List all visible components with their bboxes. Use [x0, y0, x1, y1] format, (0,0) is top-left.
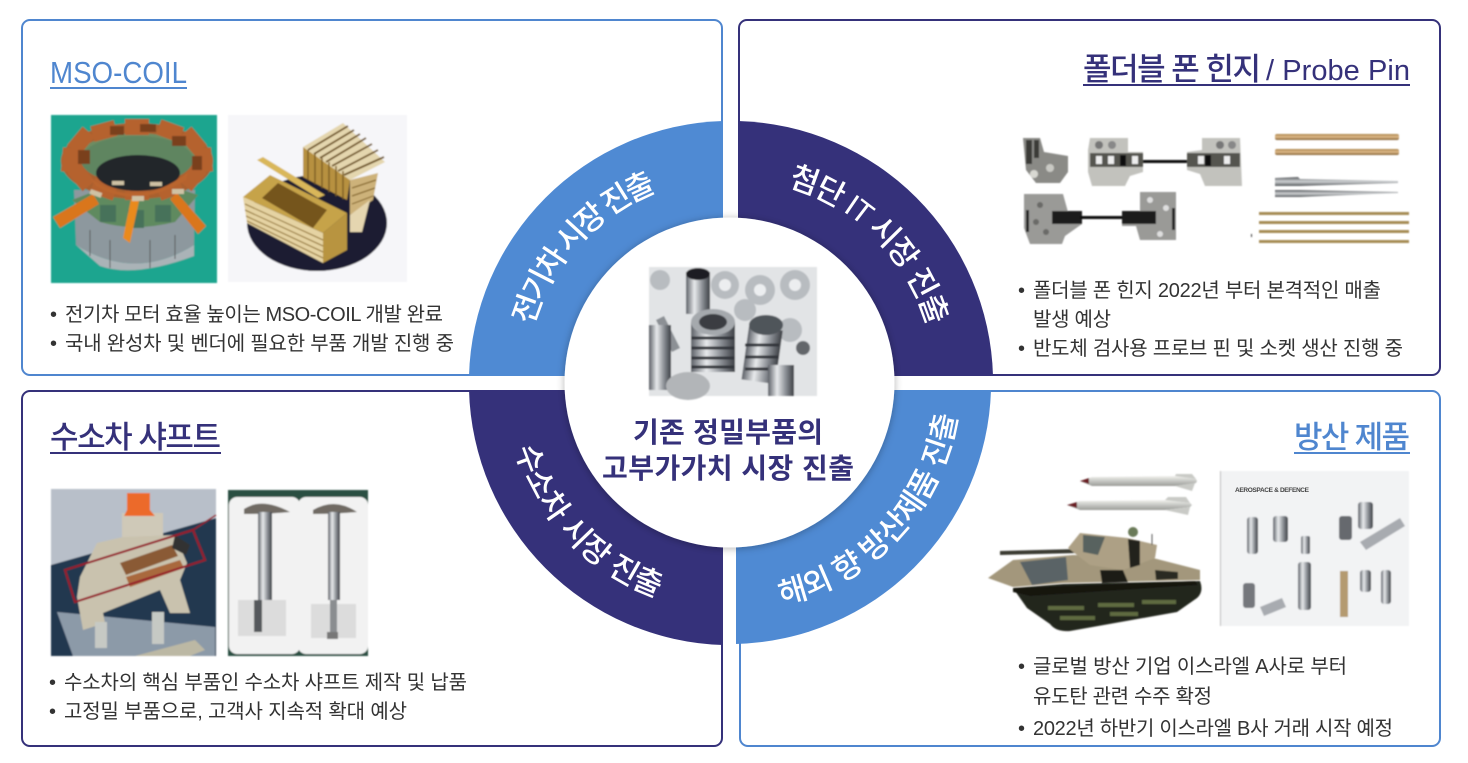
text: defense bullets: 유도탄 관련 수주 확정	[1033, 685, 1212, 708]
photo: aerospace and defence parts: AEROSPACE & DEFENCE	[1235, 487, 1310, 494]
photo: missiles and tank	[988, 474, 1201, 631]
photo: hinge parts	[1023, 138, 1242, 244]
text: hinge bullets: •	[1018, 338, 1025, 360]
heading: foldable phone hinge / Probe Pin	[1083, 52, 1410, 87]
text: MSO-COIL bullets: •	[50, 333, 57, 355]
text: MSO-COIL bullets: 전기차 모터 효율 높이는 MSO-COIL 개발 완료	[65, 303, 443, 326]
ring: quadrant electric vehicle market	[469, 121, 721, 374]
ring: quadrant hydrogen vehicle market	[469, 392, 721, 645]
photo: motor stator coil	[51, 115, 217, 283]
photo: fuel cell motor	[51, 489, 216, 656]
text: hinge bullets: •	[1018, 280, 1025, 302]
center title: 기존 정밀부품의	[633, 417, 823, 448]
photo: aerospace and defence parts	[1220, 471, 1409, 626]
center title: 고부가가치 시장 진출	[602, 453, 854, 484]
text: shaft bullets	[49, 671, 467, 723]
text: hinge bullets	[1018, 279, 1403, 360]
text: shaft bullets: 수소차의 핵심 부품인 수소차 샤프트 제작 및 납품	[64, 671, 467, 694]
ring: quadrant overseas defense market: 해외 향 방산제품 진출	[778, 414, 959, 602]
heading: MSO-COIL: MSO-COIL	[50, 55, 187, 90]
text: hinge bullets: 발생 예상	[1033, 308, 1111, 331]
heading: defense products: 방산 제품	[1294, 420, 1410, 455]
text: defense bullets: •	[1018, 656, 1025, 678]
photo: shafts in foam	[228, 490, 368, 656]
text: defense bullets	[1018, 655, 1393, 740]
photo: precision parts	[649, 267, 817, 400]
ring: quadrant advanced IT market	[740, 121, 993, 374]
center circle	[564, 218, 894, 548]
text: shaft bullets: 고정밀 부품으로, 고객사 지속적 확대 예상	[64, 700, 407, 723]
ring: quadrant overseas defense market	[736, 392, 991, 644]
text: defense bullets: •	[1018, 718, 1025, 740]
panel: foldable hinge and probe pin	[739, 20, 1440, 375]
photo: gold micro part	[228, 115, 407, 282]
center title	[602, 417, 854, 484]
panel: defense products	[740, 391, 1440, 746]
ring: quadrant hydrogen vehicle market: 수소차 시장 진출	[516, 446, 662, 598]
heading: foldable phone hinge / Probe Pin: / Probe Pin	[1266, 55, 1410, 87]
text: defense bullets: 글로벌 방산 기업 이스라엘 A사로 부터	[1033, 655, 1347, 678]
text: MSO-COIL bullets: 국내 완성차 및 벤더에 필요한 부품 개발 진행 중	[65, 332, 454, 355]
heading: foldable phone hinge / Probe Pin: 폴더블 폰 힌지	[1083, 52, 1261, 87]
text: hinge bullets: 반도체 검사용 프로브 핀 및 소켓 생산 진행 중	[1033, 337, 1403, 360]
text: hinge bullets: 폴더블 폰 힌지 2022년 부터 본격적인 매출	[1033, 279, 1381, 302]
text: shaft bullets: •	[49, 672, 56, 694]
panel: hydrogen car shaft	[22, 391, 722, 746]
text: MSO-COIL bullets	[50, 303, 454, 355]
ring: quadrant electric vehicle market: 전기차 시장 진출	[511, 170, 654, 321]
text: defense bullets: 2022년 하반기 이스라엘 B사 거래 시작 예정	[1033, 717, 1393, 740]
text: shaft bullets: •	[49, 701, 56, 723]
panel: MSO-COIL	[22, 20, 722, 375]
heading: hydrogen car shaft: 수소차 샤프트	[50, 420, 221, 455]
text: MSO-COIL bullets: •	[50, 304, 57, 326]
photo: probe pins	[1251, 134, 1409, 243]
ring: quadrant advanced IT market: 첨단 IT 시장 진출	[792, 164, 949, 324]
